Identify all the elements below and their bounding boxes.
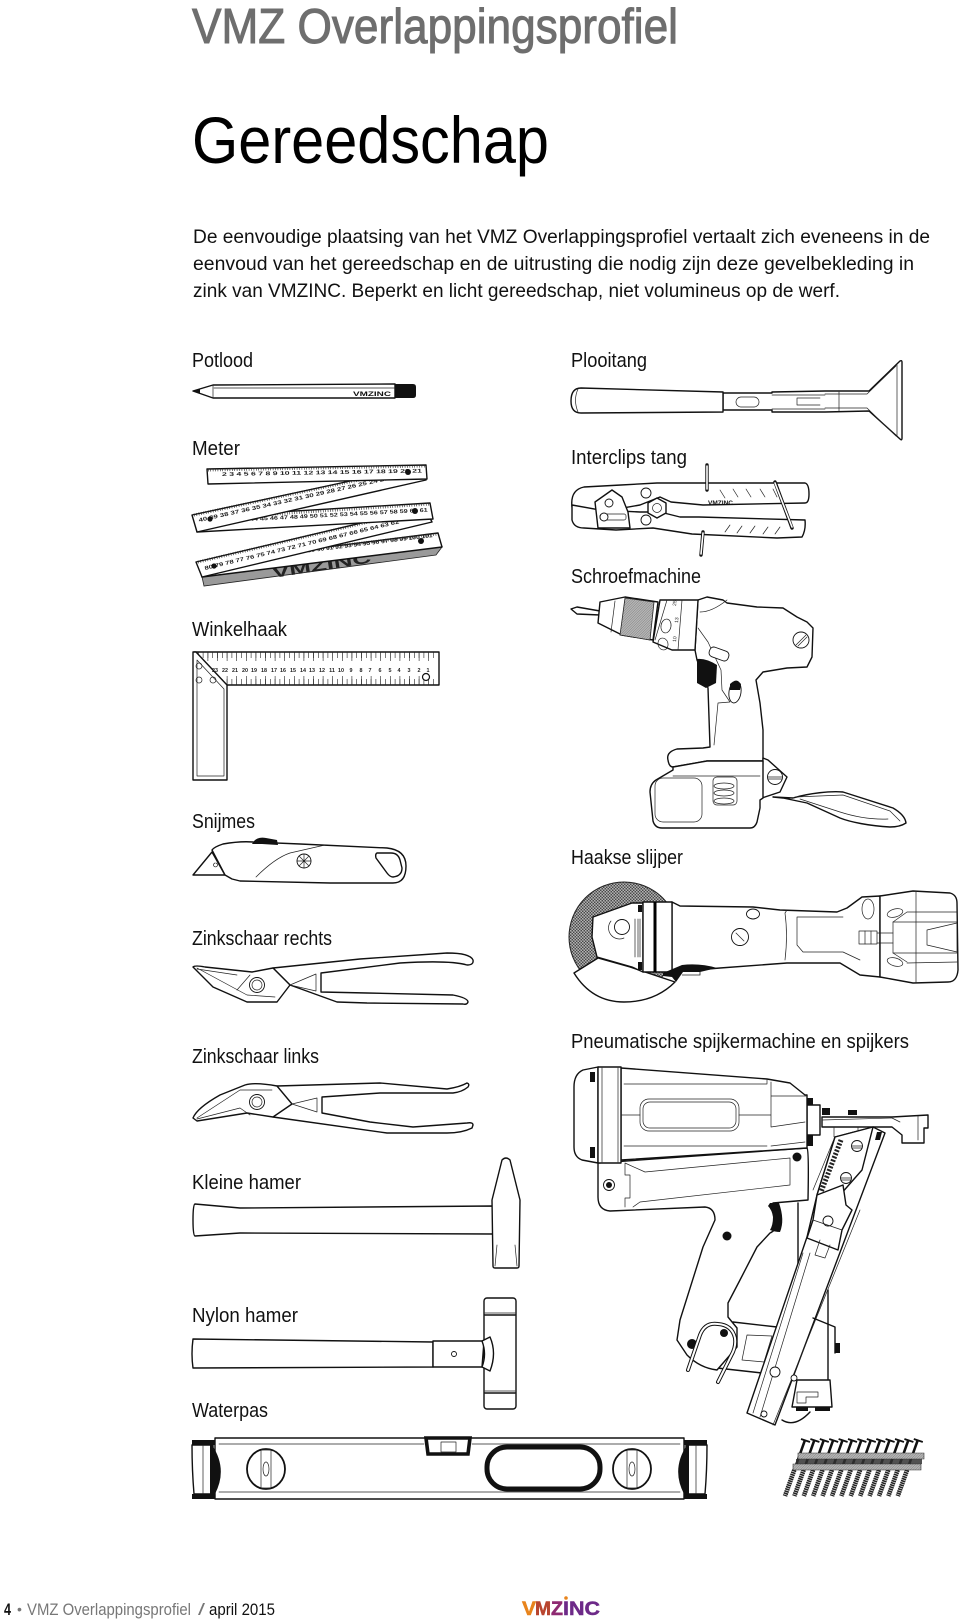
footer: page number and document title: april 2015 — [209, 1600, 275, 1619]
icon: try square: 7 — [368, 668, 372, 674]
intro paragraph: eenvoud van het gereedschap en de uitrusting die nodig zijn deze gevelbekleding in — [193, 253, 914, 275]
icon: interclip pliers: VMZINC — [708, 500, 733, 507]
icon: try square: 11 — [329, 668, 335, 674]
icon: try square: 15 — [290, 668, 296, 674]
icon: try square: 4 — [398, 668, 400, 674]
icon: try square: 1 — [426, 668, 430, 674]
logo: VMZINC — [522, 1596, 600, 1620]
icon: folding ruler: 80 79 78 77 76 75 74 73 72 71 70 69 68 67 66 65 64 63 62 — [204, 519, 400, 572]
label: Plooitang: Plooitang — [571, 350, 647, 372]
label: Snijmes: Snijmes — [192, 811, 255, 833]
icon: cordless drill: 25 — [672, 600, 678, 606]
icon: small hammer — [193, 1158, 520, 1268]
icon: pencil: VMZINC — [353, 392, 392, 398]
logo: VMZINC: Z — [551, 1599, 563, 1620]
icon: try square: 9 — [350, 668, 352, 674]
title: VMZ Overlappingsprofiel: VMZ Overlappingsprofiel — [192, 0, 678, 54]
icon: try square: 22 — [222, 668, 228, 674]
logo: VMZINC: INC — [563, 1599, 600, 1620]
footer: page number and document title: 4 — [4, 1600, 11, 1619]
label: Haakse slijper: Haakse slijper — [571, 847, 683, 869]
logo: VMZINC: V — [522, 1599, 536, 1620]
intro paragraph: De eenvoudige plaatsing van het VMZ Overlappingsprofiel vertaalt zich eveneens in de — [193, 226, 930, 248]
footer: page number and document title: • — [17, 1601, 22, 1617]
icon: spirit level — [192, 1438, 707, 1499]
icon: collated nails — [785, 1439, 924, 1496]
icon: try square: 20 — [242, 668, 248, 674]
label: Interclips tang: Interclips tang — [571, 447, 687, 469]
footer: page number and document title: / — [198, 1600, 205, 1619]
icon: folding ruler: 2 3 4 5 6 7 8 9 10 11 12 13 14 15 16 17 18 19 20 21 — [222, 469, 422, 478]
icon: try square: 10 — [338, 668, 344, 674]
intro paragraph — [193, 226, 930, 302]
icon: right-cut tin snips — [193, 953, 473, 1004]
label: Kleine hamer: Kleine hamer — [192, 1172, 301, 1194]
logo: VMZINC: M — [535, 1599, 551, 1620]
icon: try square: 18 — [261, 668, 267, 674]
icon: folding ruler: 84 85 86 87 88 89 90 91 92 93 94 95 96 97 98 99 100 101 — [262, 533, 433, 560]
heading: Gereedschap: Gereedschap — [192, 103, 549, 177]
label: Winkelhaak: Winkelhaak — [192, 619, 288, 641]
icon: interclip pliers — [572, 465, 809, 555]
label: Waterpas: Waterpas — [192, 1400, 268, 1422]
icon: try square: 21 — [232, 668, 238, 674]
icon: try square: 2 — [418, 668, 420, 674]
icon: folding ruler — [192, 465, 442, 586]
footer: page number and document title — [4, 1600, 275, 1619]
icon: folding ruler: 44 45 46 47 48 49 50 51 52 53 54 55 56 57 58 59 60 61 — [250, 508, 428, 523]
icon: folding ruler: 40 39 38 37 36 35 34 33 32 31 30 29 28 27 26 25 24 23 22 — [198, 474, 400, 524]
icon: cordless drill: 13 — [674, 617, 680, 623]
icon: try square: 13 — [309, 668, 315, 674]
icon: try square: 17 — [271, 668, 277, 674]
icon: folding ruler: VMZINC — [271, 549, 373, 582]
icon: utility knife — [193, 838, 406, 883]
icon: cordless drill: 10 — [672, 636, 678, 642]
label: Potlood: Potlood — [192, 350, 253, 372]
icon: pencil — [193, 384, 416, 398]
icon: try square — [193, 652, 439, 780]
icon: nylon hammer — [192, 1298, 516, 1409]
icon: angle grinder — [569, 882, 958, 1002]
icon: pneumatic nail gun — [574, 1067, 928, 1425]
icon: try square: 19 — [251, 668, 257, 674]
icon: try square: 6 — [378, 668, 382, 674]
icon: try square: 16 — [280, 668, 286, 674]
label: Meter: Meter — [192, 438, 240, 460]
icon: folding pliers — [571, 361, 902, 440]
icon: try square: 3 — [408, 668, 410, 674]
label: Pneumatische spijkermachine en spijkers: Pneumatische spijkermachine en spijkers — [571, 1031, 909, 1053]
label: Zinkschaar links: Zinkschaar links — [192, 1046, 319, 1068]
icon: left-cut tin snips — [193, 1083, 473, 1133]
intro paragraph: zink van VMZINC. Beperkt en licht gereedschap, niet volumineus op de werf. — [193, 280, 840, 302]
icon: try square: 12 — [319, 668, 325, 674]
label: Zinkschaar rechts: Zinkschaar rechts — [192, 928, 332, 950]
icon: try square: 23 — [212, 668, 218, 674]
icon: try square: 8 — [360, 668, 362, 674]
icon: try square: 14 — [300, 668, 306, 674]
label: Nylon hamer: Nylon hamer — [192, 1305, 298, 1327]
icon: try square: 5 — [388, 668, 392, 674]
footer: page number and document title: VMZ Overlappingsprofiel — [27, 1600, 191, 1619]
icon: cordless drill — [571, 597, 906, 828]
label: Schroefmachine: Schroefmachine — [571, 566, 701, 588]
